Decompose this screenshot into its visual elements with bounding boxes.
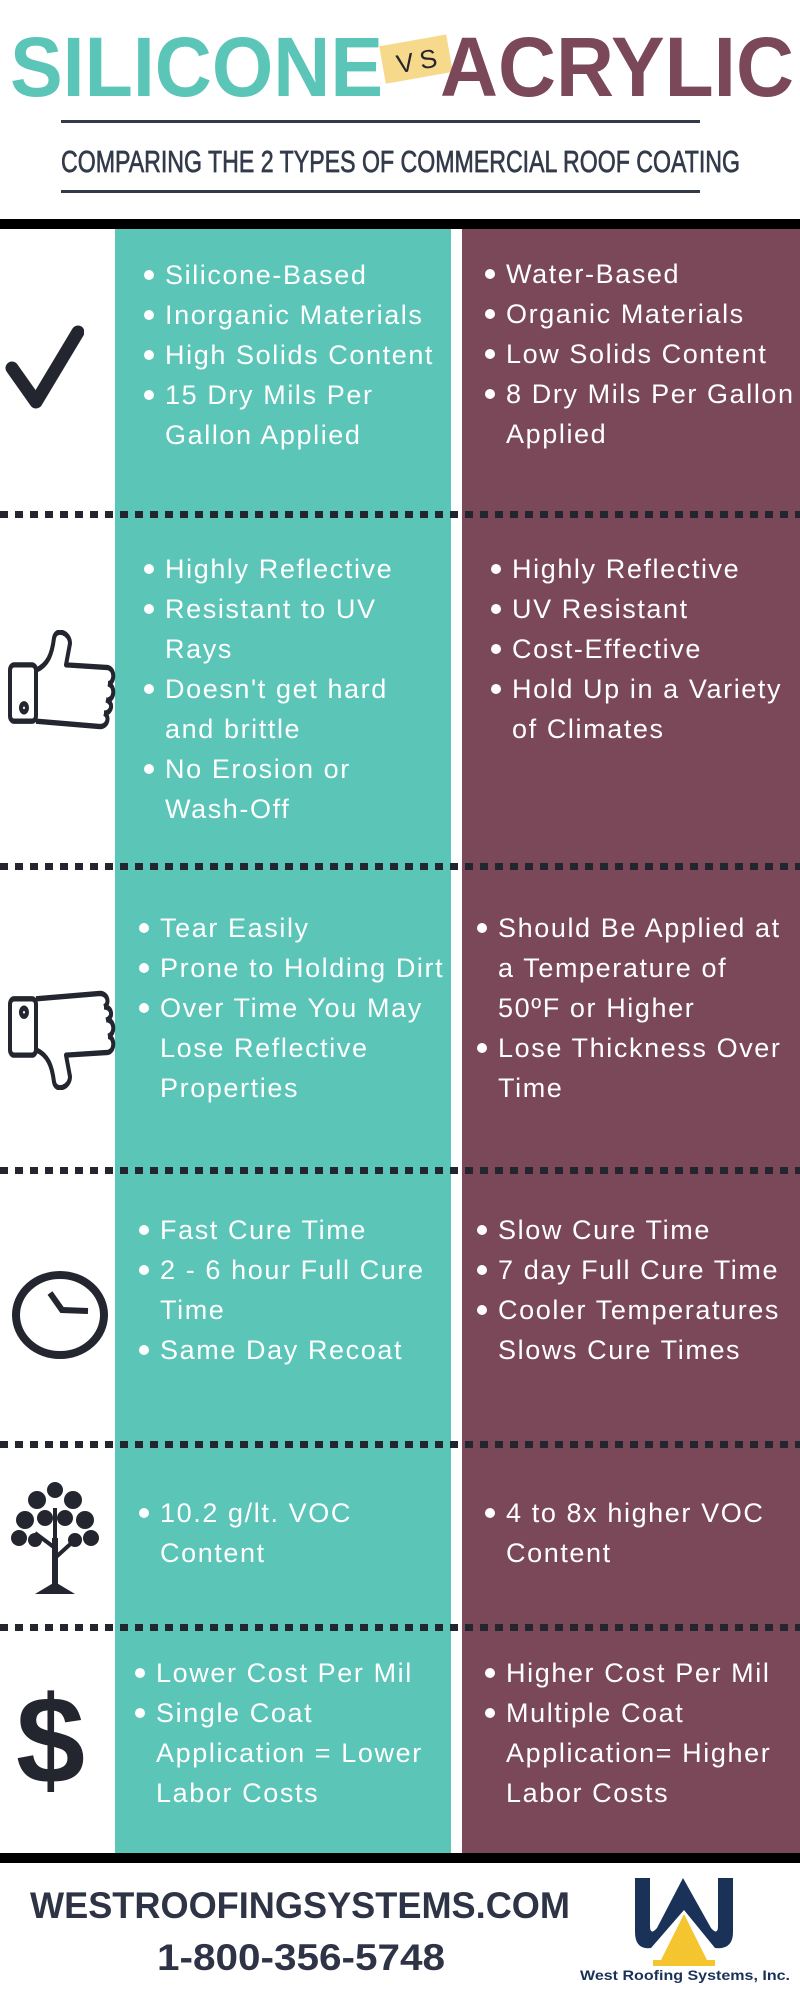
title bbox=[10, 20, 794, 110]
text: silicone pros: Resistant to UV bbox=[165, 594, 377, 624]
icon: check bbox=[6, 326, 84, 408]
text: acrylic pros: Highly Reflective bbox=[512, 554, 740, 584]
text: silicone pros bbox=[144, 554, 393, 824]
text: acrylic cost: Higher Cost Per Mil bbox=[506, 1658, 770, 1688]
text: acrylic cure: Cooler Temperatures bbox=[498, 1295, 780, 1325]
text: silicone cost: Lower Cost Per Mil bbox=[156, 1658, 413, 1688]
vs tag: VS bbox=[394, 42, 445, 79]
text: silicone cons: Tear Easily bbox=[160, 913, 310, 943]
text: acrylic cons: 50ºF or Higher bbox=[498, 993, 695, 1023]
text: acrylic composition: Low Solids Content bbox=[506, 339, 767, 369]
text: silicone cons bbox=[139, 913, 444, 1103]
text: silicone voc: Content bbox=[160, 1538, 266, 1568]
text: silicone cure: Time bbox=[160, 1295, 225, 1325]
text: acrylic composition bbox=[485, 259, 795, 449]
vs tag bbox=[379, 34, 453, 84]
text: acrylic cons: a Temperature of bbox=[498, 953, 727, 983]
text: silicone composition bbox=[144, 260, 434, 450]
text: acrylic cost: Application= Higher bbox=[506, 1738, 771, 1768]
text: silicone cons: Lose Reflective bbox=[160, 1033, 369, 1063]
text: acrylic voc: Content bbox=[506, 1538, 612, 1568]
text: silicone cost: Labor Costs bbox=[156, 1778, 319, 1808]
text: silicone cons: Properties bbox=[160, 1073, 299, 1103]
text: silicone pros: Wash-Off bbox=[165, 794, 290, 824]
text: acrylic cost bbox=[485, 1658, 771, 1808]
text: silicone composition: Gallon Applied bbox=[165, 420, 362, 450]
logo bbox=[580, 1878, 790, 1983]
text: silicone composition: High Solids Content bbox=[165, 340, 434, 370]
icon: thumbs down bbox=[8, 990, 116, 1090]
logo: West Roofing Systems, Inc. bbox=[580, 1967, 790, 1983]
text: silicone cons: Over Time You May bbox=[160, 993, 423, 1023]
text: silicone pros: Rays bbox=[165, 634, 233, 664]
text: acrylic voc bbox=[485, 1498, 764, 1568]
text: acrylic pros: Hold Up in a Variety bbox=[512, 674, 782, 704]
text: acrylic cure bbox=[477, 1215, 780, 1365]
text: acrylic cure: Slow Cure Time bbox=[498, 1215, 711, 1245]
text: silicone composition: Inorganic Materials bbox=[165, 300, 424, 330]
panel: acrylic column bbox=[462, 229, 800, 1853]
text: silicone voc: 10.2 g/lt. VOC bbox=[160, 1498, 352, 1528]
text: acrylic cure: 7 day Full Cure Time bbox=[498, 1255, 779, 1285]
text: acrylic pros: Cost-Effective bbox=[512, 634, 702, 664]
panel: silicone column bbox=[115, 229, 451, 1853]
footer: website and phone: WESTROOFINGSYSTEMS.COM bbox=[30, 1885, 570, 1926]
text: acrylic cons bbox=[477, 913, 782, 1103]
icon: tree bbox=[11, 1482, 99, 1594]
text: silicone cure: 2 - 6 hour Full Cure bbox=[160, 1255, 425, 1285]
text: silicone composition: 15 Dry Mils Per bbox=[165, 380, 374, 410]
text: silicone cure bbox=[139, 1215, 425, 1365]
text: silicone composition: Silicone-Based bbox=[165, 260, 368, 290]
text: acrylic composition: Organic Materials bbox=[506, 299, 745, 329]
text: silicone cost: Application = Lower bbox=[156, 1738, 423, 1768]
text: silicone cost: Single Coat bbox=[156, 1698, 313, 1728]
icon: clock bbox=[12, 1271, 108, 1359]
text: silicone cure: Same Day Recoat bbox=[160, 1335, 403, 1365]
text: silicone pros: Highly Reflective bbox=[165, 554, 393, 584]
text: silicone pros: and brittle bbox=[165, 714, 301, 744]
text: silicone pros: No Erosion or bbox=[165, 754, 351, 784]
text: acrylic composition: 8 Dry Mils Per Gallon bbox=[506, 379, 795, 409]
text: acrylic cost: Multiple Coat bbox=[506, 1698, 684, 1728]
text: silicone voc bbox=[139, 1498, 352, 1568]
text: silicone cons: Prone to Holding Dirt bbox=[160, 953, 444, 983]
footer: website and phone bbox=[30, 1885, 570, 1978]
text: acrylic pros: UV Resistant bbox=[512, 594, 689, 624]
text: acrylic cure: Slows Cure Times bbox=[498, 1335, 741, 1365]
text: acrylic cost: Labor Costs bbox=[506, 1778, 669, 1808]
text: acrylic composition: Applied bbox=[506, 419, 607, 449]
text: acrylic cons: Time bbox=[498, 1073, 563, 1103]
text: acrylic composition: Water-Based bbox=[506, 259, 680, 289]
icon: thumbs up bbox=[8, 630, 116, 730]
text: acrylic cons: Should Be Applied at bbox=[498, 913, 781, 943]
text: silicone cure: Fast Cure Time bbox=[160, 1215, 367, 1245]
footer: website and phone: 1-800-356-5748 bbox=[157, 1937, 445, 1978]
text: acrylic cons: Lose Thickness Over bbox=[498, 1033, 782, 1063]
icon: dollar: $ bbox=[16, 1672, 85, 1810]
text: silicone cost bbox=[135, 1658, 423, 1808]
text: acrylic voc: 4 to 8x higher VOC bbox=[506, 1498, 764, 1528]
text: acrylic pros: of Climates bbox=[512, 714, 665, 744]
text: silicone pros: Doesn't get hard bbox=[165, 674, 388, 704]
text: acrylic pros bbox=[491, 554, 782, 744]
